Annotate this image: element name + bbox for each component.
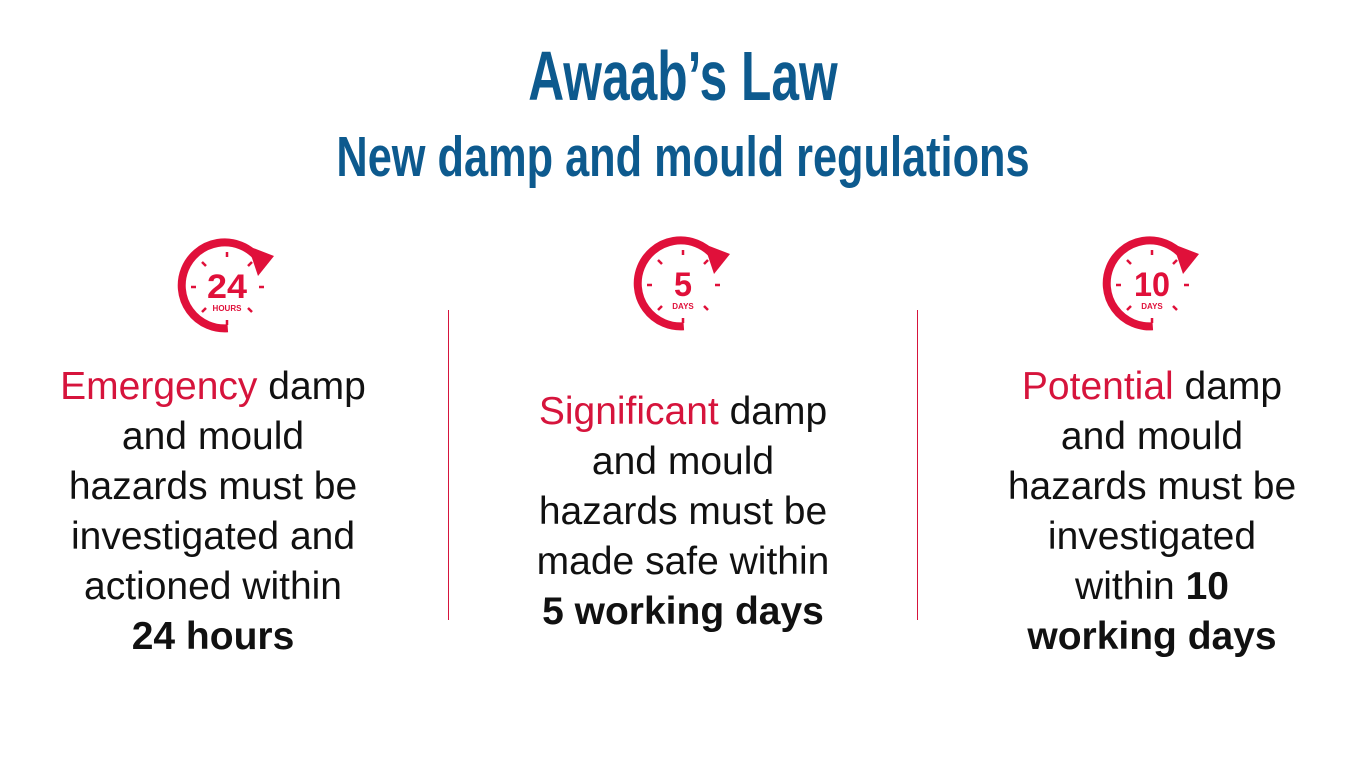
text: emergency (60, 365, 366, 658)
text: significant (537, 390, 829, 633)
text: significant: Significant damp (539, 390, 827, 433)
text: potential: Potential damp (1022, 365, 1282, 408)
text: potential: hazards must be (1008, 465, 1296, 508)
text: potential: within 10 (1075, 565, 1229, 608)
subtitle: New damp and mould regulations (336, 125, 1030, 189)
text: emergency: and mould (122, 415, 304, 458)
title: Awaab’s Law (528, 37, 838, 115)
text: potential (1008, 365, 1296, 658)
icon: 10 days clock (1102, 236, 1199, 330)
text: significant: and mould (592, 440, 774, 483)
text: significant: hazards must be (539, 490, 827, 533)
text: emergency: actioned within (84, 565, 342, 608)
icon: 24 hours clock: 24 (207, 268, 247, 306)
icon: 10 days clock: DAYS (1141, 302, 1163, 311)
text: significant: made safe within (537, 540, 829, 583)
text: potential: working days (1027, 615, 1277, 658)
icon: 5 days clock (634, 236, 730, 330)
text: emergency: hazards must be (69, 465, 357, 508)
text: potential: and mould (1061, 415, 1243, 458)
text: emergency: investigated and (71, 515, 355, 558)
text: emergency: 24 hours (132, 615, 294, 658)
text: potential: investigated (1048, 515, 1256, 558)
text: significant: 5 working days (542, 590, 824, 633)
icon: 24 hours clock (178, 238, 274, 332)
text: emergency: Emergency damp (60, 365, 366, 408)
icon: 24 hours clock: HOURS (213, 304, 242, 313)
icon: 5 days clock: DAYS (672, 302, 694, 311)
icon: 10 days clock: 10 (1134, 266, 1170, 304)
icon: 5 days clock: 5 (674, 266, 692, 304)
